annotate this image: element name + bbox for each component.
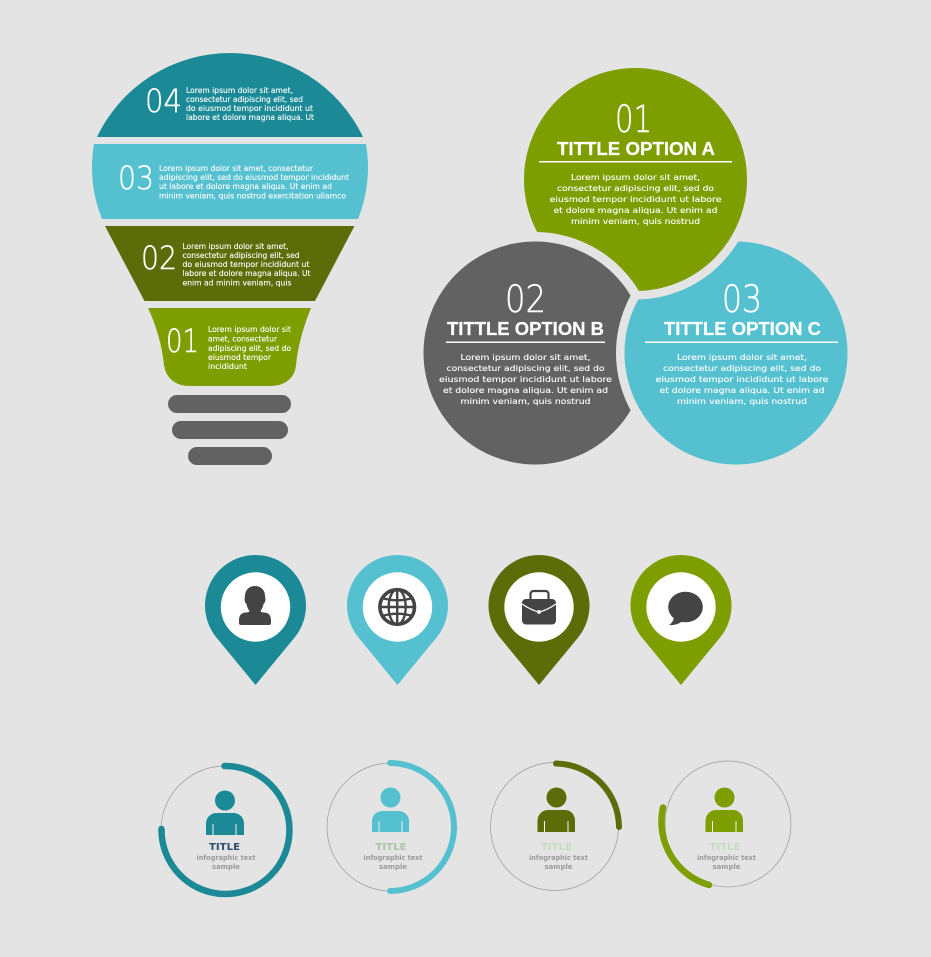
bulb segment 01: amet, consectetur (208, 334, 278, 344)
circle 03 option C: eiusmod tempor incididunt ut labore (656, 375, 829, 384)
circle 03 option C: Lorem ipsum dolor sit amet, (677, 353, 807, 362)
pin: person (205, 555, 306, 685)
bulb segment 01: incididunt (208, 362, 247, 371)
ring 3: infographic text (529, 854, 589, 862)
ring 2: sample (379, 863, 407, 871)
bulb segment 03: ut labore et dolore magna aliqua. Ut enim ad (159, 182, 332, 191)
ring 2: infographic text (364, 854, 423, 862)
circle 02 option B (424, 242, 646, 464)
bulb segment 02: do eiusmod tempor incididunt ut (182, 260, 310, 269)
bulb base bars (168, 395, 291, 465)
circle 01 option A: 01 (615, 98, 652, 141)
circle 03 option C: consectetur adipiscing elit, sed do (663, 364, 821, 373)
bulb segment 01: eiusmod tempor (208, 353, 272, 362)
circle 01 option A: Lorem ipsum dolor sit amet, (571, 173, 700, 182)
bulb segment 04 (97, 53, 363, 137)
bulb segment 02: 02 (141, 239, 177, 277)
bulb segment 04: Lorem ipsum dolor sit amet, (186, 86, 293, 95)
circle 03 option C: TITTLE OPTION C (664, 319, 821, 339)
circle 03 option C (624, 242, 848, 464)
bulb segment 02 (105, 226, 354, 301)
ring 4: TITLE (710, 842, 741, 853)
bulb segment 02: labore et dolore magna aliqua. Ut (182, 269, 310, 278)
bulb segment 02: enim ad minim veniam, quis (182, 278, 292, 288)
bulb segment 03: Lorem ipsum dolor sit amet, consectetur (159, 164, 314, 173)
ring 4: sample (712, 863, 741, 871)
pin: globe (347, 555, 448, 685)
bulb segment 01: 01 (166, 322, 199, 360)
circle 01 option A: TITTLE OPTION A (557, 139, 715, 159)
bulb segment 03 (92, 144, 368, 219)
bulb segment 01: Lorem ipsum dolor sit (208, 325, 291, 334)
circle 03 option C: et dolore magna aliqua. Ut enim ad (660, 386, 824, 395)
ring 3: TITLE (541, 842, 572, 853)
circle 01 option A: et dolore magna aliqua. Ut enim ad (554, 206, 718, 215)
ring 4: infographic text (697, 854, 757, 862)
ring 4 (661, 761, 791, 887)
circle 01 option A (524, 68, 747, 291)
bulb segment 02: Lorem ipsum dolor sit amet, (182, 242, 288, 251)
circle 02 option B: Lorem ipsum dolor sit amet, (460, 353, 590, 362)
bulb segment 04: do eiusmod tempor incididunt ut (186, 104, 313, 113)
ring 1: infographic text (196, 854, 256, 862)
circle 01 option A: consectetur adipiscing elit, sed do (557, 184, 714, 193)
panel: progress rings row (161, 761, 791, 894)
panel: three overlapping circles (424, 68, 848, 464)
ring 2: TITLE (376, 842, 407, 853)
circle 02 option B: TITTLE OPTION B (447, 319, 604, 339)
circle 03 option C: 03 (722, 278, 762, 321)
circle 02 option B: eiusmod tempor incididunt ut labore (439, 375, 612, 384)
bulb segment 01: adipiscing elit, sed do (208, 344, 291, 353)
circle 02 option B: consectetur adipiscing elit, sed do (446, 364, 605, 373)
bulb segment 02: consectetur adipiscing elit, sed (182, 251, 300, 260)
circle 01 option A: eiusmod tempor incididunt ut labore (550, 195, 722, 204)
panel: map pins row (205, 555, 732, 685)
bulb segment 03: adipiscing elit, sed do eiusmod tempor incididunt (159, 173, 349, 182)
bulb segment 03: 03 (118, 159, 154, 197)
pin: speech bubble (630, 555, 732, 685)
panel: light bulb diagram (92, 53, 368, 465)
bulb segment 04: consectetur adipiscing elit, sed (186, 95, 303, 104)
ring 2 (327, 763, 455, 891)
ring 1: TITLE (209, 842, 240, 853)
bulb segment 04: 04 (145, 82, 182, 120)
circle 02 option B: et dolore magna aliqua. Ut enim ad (443, 386, 608, 395)
bulb segment 03: minim veniam, quis nostrud exercitation ullamco (159, 192, 346, 200)
ring 3: sample (544, 863, 573, 871)
bulb segment 01 (148, 308, 311, 386)
ring 3 (490, 762, 619, 890)
circle 03 option C: minim veniam, quis nostrud (677, 397, 807, 406)
bulb segment 04: labore et dolore magna aliqua. Ut (186, 113, 314, 122)
circle 01 option A: minim veniam, quis nostrud (571, 217, 700, 226)
ring 1 (161, 766, 289, 894)
circle 02 option B: 02 (505, 278, 546, 321)
circle 02 option B: minim veniam, quis nostrud (460, 397, 590, 406)
ring 1: sample (212, 863, 240, 871)
pin: briefcase (488, 555, 590, 685)
